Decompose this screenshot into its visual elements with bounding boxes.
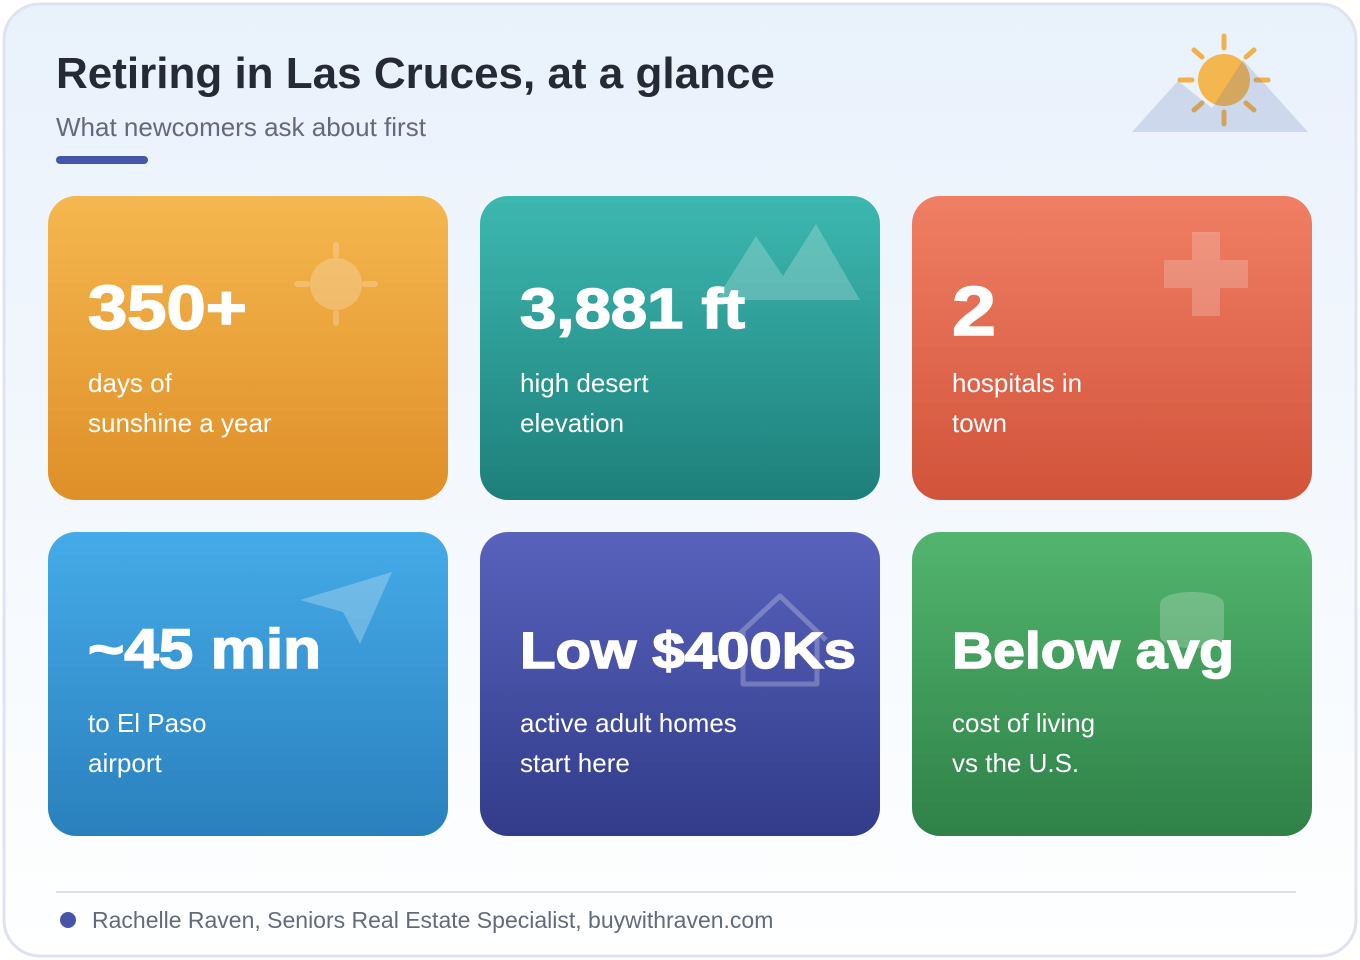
stat label: high desert <box>520 368 649 398</box>
stat label: to El Paso <box>88 708 207 738</box>
stat label: start here <box>520 748 630 778</box>
stat value: 350+ <box>88 274 247 343</box>
icon: sun <box>294 242 378 326</box>
card: homes <box>480 532 880 836</box>
icon: house <box>737 596 826 684</box>
stat label: days of <box>88 368 172 398</box>
card: elevation <box>480 196 880 500</box>
stat label: cost of living <box>952 708 1095 738</box>
card: sunshine <box>48 196 448 500</box>
stat label: sunshine a year <box>88 408 272 438</box>
icon: medical cross <box>1164 232 1248 316</box>
icon: sun over mountains <box>1132 36 1308 132</box>
stat label: town <box>952 408 1007 438</box>
icon: savings jar <box>1160 592 1224 648</box>
stat label: hospitals in <box>952 368 1082 398</box>
card: airport <box>48 532 448 836</box>
subtitle: What newcomers ask about first <box>56 112 427 142</box>
stat label: active adult homes <box>520 708 737 738</box>
stat label: elevation <box>520 408 624 438</box>
stat label: vs the U.S. <box>952 748 1079 778</box>
footer credit: Rachelle Raven, Seniors Real Estate Specialist, buywithraven.com <box>92 907 773 933</box>
stat value: Below avg <box>952 622 1234 679</box>
stat value: 2 <box>952 272 996 350</box>
stat value: 3,881 ft <box>520 277 745 341</box>
icon: mountains <box>716 224 860 300</box>
footer dot <box>60 912 76 928</box>
accent bar <box>56 156 148 164</box>
icon part: sun disc <box>1198 54 1250 106</box>
footer divider <box>56 891 1296 893</box>
card: cost of living <box>912 532 1312 836</box>
title: Retiring in Las Cruces, at a glance <box>56 49 775 98</box>
icon part: sun rays <box>1180 36 1268 124</box>
stat label: airport <box>88 748 162 778</box>
stat value: ~45 min <box>88 617 321 680</box>
stat value: Low $400Ks <box>520 622 856 679</box>
card: hospitals <box>912 196 1312 500</box>
icon part: mountains <box>1132 60 1308 132</box>
icon: paper plane <box>300 572 392 644</box>
